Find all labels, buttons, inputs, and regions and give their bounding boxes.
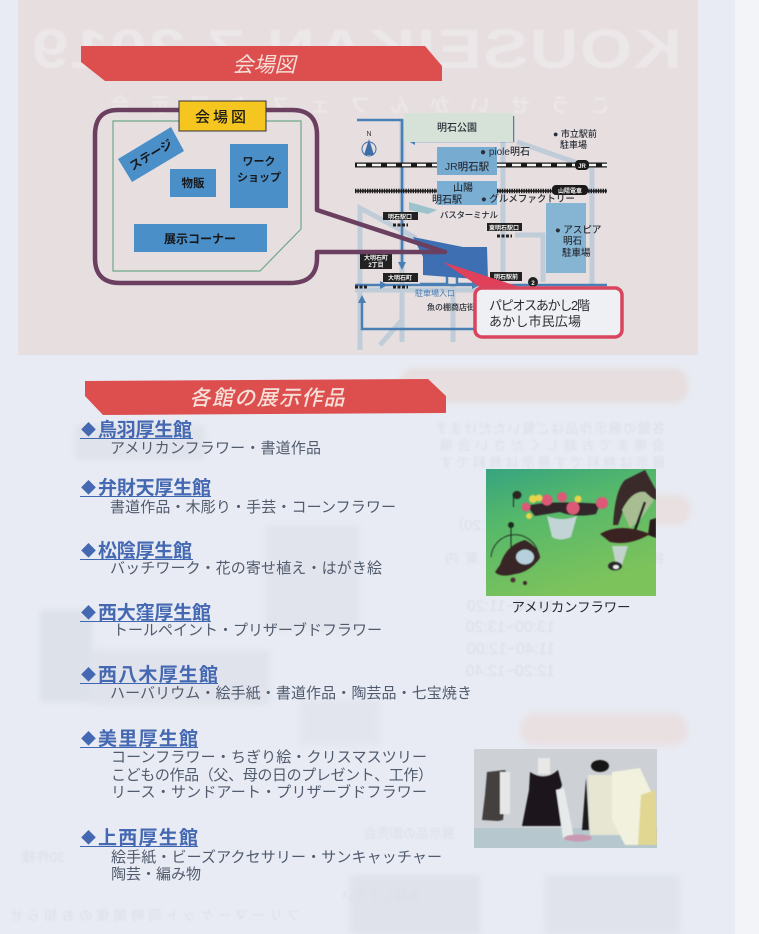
map place names: JR明石駅 (445, 161, 490, 173)
map place names: 駐車場 (562, 247, 591, 259)
blue road arrows (355, 116, 607, 329)
Sanyo railway: 山陽電車 (558, 187, 582, 195)
panel: pink venue section background: こうせいかんフェスタ展示会 (110, 94, 610, 117)
heading banner: venue map (81, 46, 442, 81)
hall: Nishi-Yagi: 西八木厚生館 (98, 664, 218, 686)
bus stop labels: 東明石駅口 (489, 224, 519, 232)
hall: Toba: 鳥羽厚生館 (98, 418, 192, 441)
show-through marks from reverse side: 会場までお越しください会場 (440, 438, 665, 453)
bus stop dots (355, 225, 512, 287)
hall: Kaminishi: 陶芸・編み物 (111, 865, 201, 883)
heading banner: exhibits by hall: 各館の展示作品 (190, 387, 346, 410)
hall: Misato: こどもの作品（父、母の日のプレゼント、工作） (111, 767, 433, 784)
area: stage: ステージ (127, 137, 175, 173)
map place names: 駐車場 (560, 139, 587, 150)
map place names: 魚の棚商店街 (427, 302, 475, 312)
white vase (547, 516, 577, 540)
show-through marks from reverse side: 13:00~13:20 (465, 619, 555, 636)
map place names: ● アスピア (555, 225, 601, 236)
hall: Nishi-Yagi: ◆ (81, 667, 96, 684)
map place names: バスターミナル (440, 210, 498, 220)
hall: Nishi-Yagi (80, 664, 472, 702)
show-through marks from reverse side: （土・土:20） (449, 517, 545, 534)
callout: Pipios Akashi: パピオスあかし2階 (489, 298, 590, 313)
area: sales (170, 169, 216, 197)
hall: Benzaiten: ◆ (81, 480, 96, 497)
yellow lace panel (638, 790, 657, 845)
white cardigan (612, 768, 655, 845)
hall: Misato: リース・サンドアート・プリザーブドフラワー (111, 783, 427, 801)
map roads (355, 120, 607, 350)
flower foliage (527, 502, 600, 516)
small bird ornament (512, 491, 522, 507)
Akashi park: 明石公園 (437, 122, 477, 134)
bus stop labels: 2 (531, 281, 535, 287)
area: exhibition corner (134, 224, 267, 252)
show-through marks from reverse side: 展示品の即売会 (364, 826, 455, 841)
Aspia parking block (546, 203, 586, 273)
hall: Shoin: 松陰厚生館 (98, 540, 192, 562)
hall: Nishi-Yagi: ハーバリウム・絵手紙・書道作品・陶芸品・七宝焼き (110, 684, 472, 702)
area: workshop: ショップ (237, 171, 281, 184)
show-through marks from reverse side: 13:00~11:20 (467, 598, 555, 615)
Pipios building (413, 237, 488, 280)
hall: Nishi-Okubo: 西大窪厚生館 (98, 602, 211, 624)
bus stop labels: 大明石町 (388, 274, 412, 282)
compass (362, 131, 376, 156)
hall: Misato (80, 728, 433, 801)
hall: Nishi-Okubo: ◆ (81, 605, 96, 622)
hall: Benzaiten (80, 476, 396, 516)
road arrow heads (358, 137, 480, 303)
Sanyo Akashi station block (437, 181, 497, 205)
show-through marks from reverse side: 12:20~12:40 (465, 663, 555, 680)
panel: pink venue section background: KOUSEIKAN 7 2019 (32, 18, 682, 81)
show-through marks from reverse side: お越し下さい (342, 888, 420, 903)
pink flowers (522, 492, 608, 514)
area: exhibition corner: 展示コーナー (164, 232, 236, 246)
black hat (591, 760, 609, 772)
right basket arrangement (600, 470, 656, 565)
black dotted top (522, 770, 565, 826)
pink cloth (564, 834, 592, 842)
hall: Kaminishi: 絵手紙・ビーズアクセサリー・サンキャッチャー (111, 849, 442, 866)
hall: Shoin (80, 540, 382, 577)
area: workshop: ワーク (242, 155, 276, 168)
hall: Toba: アメリカンフラワー・書道作品 (110, 440, 321, 457)
compass: N (366, 131, 372, 138)
map place names: ● piole明石 (480, 146, 530, 158)
map place names: 駐車場入口 (415, 288, 455, 298)
hall: Kaminishi: 上西厚生館 (98, 827, 198, 849)
yellow flowers (526, 494, 582, 519)
bus stop labels: 明石駅前 (494, 273, 518, 281)
show-through marks from reverse side: 展示は無料です展示は無料です (440, 455, 665, 470)
venue floor plan callout (95, 101, 445, 283)
hall: Shoin: ◆ (81, 543, 96, 560)
JR Akashi station block (437, 147, 497, 175)
area: workshop (230, 144, 288, 208)
cream blouse (588, 775, 620, 835)
JR railway: JR (578, 164, 587, 170)
hall: Nishi-Okubo (80, 602, 382, 639)
heading banner: exhibits by hall (85, 379, 446, 415)
hall: Kaminishi (80, 827, 442, 883)
hanging wreath (491, 522, 540, 585)
venue boundary (113, 121, 301, 271)
hall: Misato: ◆ (81, 731, 96, 748)
black stand (582, 778, 589, 830)
label: venue map (179, 101, 266, 131)
bus terminal block (409, 202, 437, 214)
Sanyo railway (355, 185, 607, 195)
show-through marks from reverse side (10, 368, 690, 934)
map place names: 明石駅 (432, 194, 462, 206)
area: stage (118, 127, 184, 182)
photo caption: アメリカンフラワー (512, 600, 630, 615)
heading banner: venue map: 会場図 (232, 54, 298, 77)
photo: American flower arrangements (486, 469, 656, 596)
panel: pink venue section background (18, 0, 698, 355)
Akashi park (404, 113, 513, 142)
map place names: 山陽 (453, 182, 473, 194)
area: sales: 物販 (182, 176, 205, 190)
callout outline (95, 110, 445, 283)
map place names (415, 128, 601, 312)
hall: Toba (80, 418, 321, 457)
hall: Shoin: バッチワーク・花の寄せ植え・はがき絵 (110, 560, 382, 577)
hall: Nishi-Okubo: トールペイント・プリザーブドフラワー (113, 621, 382, 639)
callout: Pipios Akashi: あかし市民広場 (489, 314, 581, 329)
show-through marks from reverse side: 11:40~12:00 (467, 641, 555, 658)
show-through marks from reverse side: フリーマーケット同時開催のお知らせ (10, 908, 300, 923)
map place names: ● グルメファクトリー (481, 193, 575, 205)
bus stop labels (360, 212, 538, 287)
hall: Benzaiten: 書道作品・木彫り・手芸・コーンフラワー (110, 499, 396, 516)
hall: Toba: ◆ (81, 422, 96, 439)
map place names: ● 市立駅前 (553, 128, 597, 139)
grey knit outfit (482, 770, 510, 821)
JR railway (355, 160, 607, 170)
bus stop labels: 大明石町 (364, 254, 388, 262)
hall: Kaminishi: ◆ (81, 830, 96, 847)
photo: knitted clothing display (474, 749, 657, 848)
callout: Pipios Akashi (443, 262, 622, 337)
white mannequin neck (538, 758, 550, 774)
label: venue map: 会場図 (195, 109, 249, 126)
hall: Benzaiten: 弁財天厚生館 (98, 476, 211, 499)
show-through marks from reverse side: 各館の体験教室のご案内 (445, 551, 665, 566)
hall: Misato: 美里厚生館 (98, 728, 198, 750)
show-through marks from reverse side: 各館の展示作品はご覧いただけます (435, 421, 665, 436)
hall: Misato: コーンフラワー・ちぎり絵・クリスマスツリー (111, 749, 427, 766)
route map (355, 113, 607, 350)
map place names: 明石 (563, 236, 582, 247)
bus stop labels: 明石駅口 (388, 214, 412, 221)
show-through marks from reverse side: 30件様 (21, 849, 65, 865)
bus stop labels: 2丁目 (368, 262, 384, 269)
